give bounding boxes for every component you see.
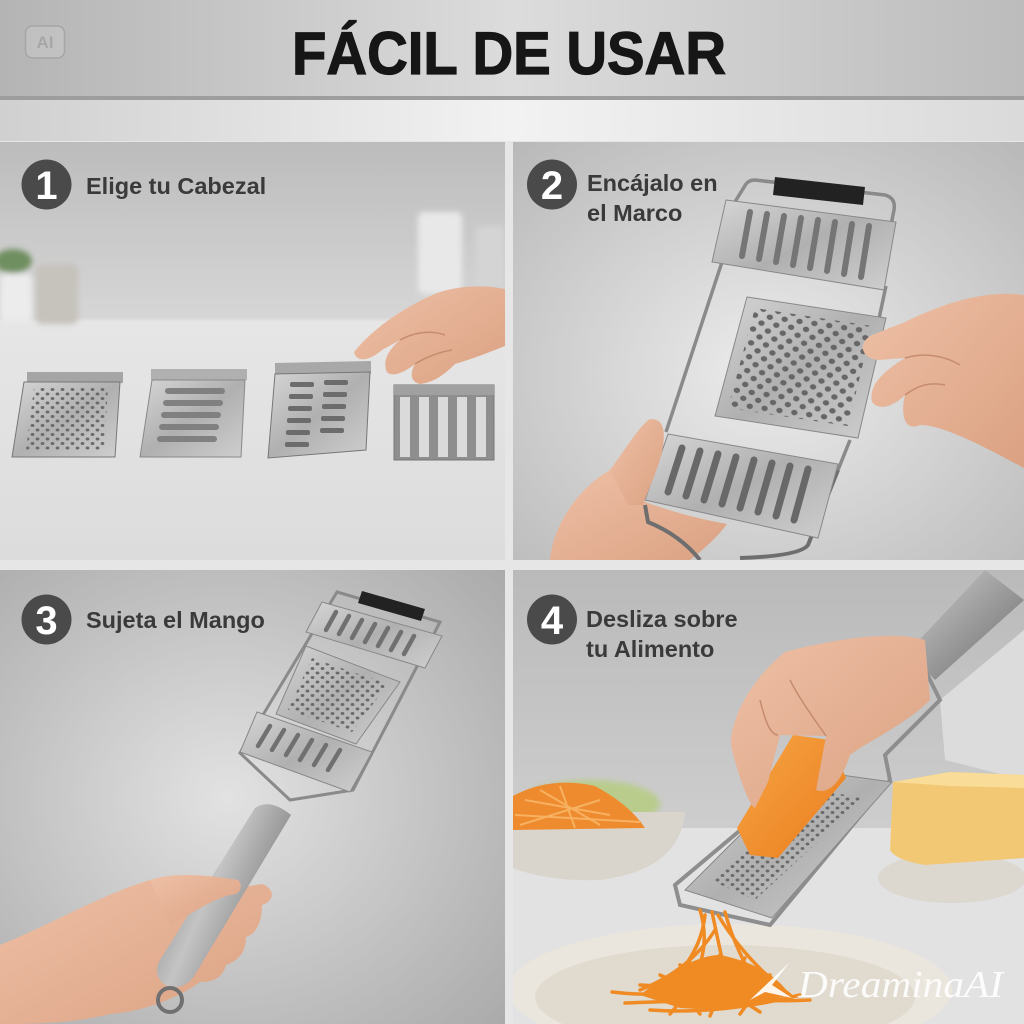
- header banner: [0, 0, 1024, 141]
- bottom slotted blade: [645, 434, 838, 538]
- step 2 badge: [527, 160, 577, 210]
- step 4 label: tu Alimento: [586, 636, 714, 662]
- step 4 label: Desliza sobre: [586, 606, 738, 632]
- countertop: [513, 828, 1024, 996]
- panel: step 4: [508, 570, 1024, 1024]
- grater head 1: [12, 372, 123, 457]
- grater head 4: [394, 385, 494, 460]
- complete grater: [157, 591, 442, 1012]
- grater in use: [675, 570, 1024, 925]
- hand on carrot: [731, 636, 930, 808]
- panel: step 1: [0, 142, 505, 560]
- step 4 badge: 4: [541, 599, 564, 643]
- step 2 badge: 2: [541, 164, 563, 208]
- salad bowl: [513, 780, 685, 880]
- center perforated plate: [715, 297, 886, 438]
- handle grip: [773, 177, 865, 205]
- title: FÁCIL DE USAR: [292, 20, 726, 87]
- step 3 label: Sujeta el Mango: [86, 607, 265, 633]
- watermark: DreaminaAI: [797, 964, 1006, 1006]
- hand palm and fingers: [0, 878, 272, 1024]
- handle: [157, 804, 291, 1012]
- hand: [354, 286, 505, 384]
- step 1 badge: 1: [35, 164, 58, 208]
- thumb of left hand: [610, 419, 664, 505]
- left hand palm and fingers: [550, 470, 727, 560]
- step 1 label: Elige tu Cabezal: [86, 173, 266, 199]
- step 4 badge: [527, 594, 577, 644]
- top slotted blade: [712, 200, 896, 290]
- carrot block: [737, 735, 846, 858]
- AI badge: [26, 26, 64, 58]
- panel: step 2: [513, 142, 1024, 560]
- frame: [645, 177, 896, 560]
- grater handle: [920, 570, 1024, 680]
- step 3 badge: [22, 594, 72, 644]
- grater head 3: [268, 361, 371, 458]
- AI badge: AI: [36, 33, 54, 52]
- grated carrot: [612, 910, 810, 1016]
- large plate: [508, 924, 952, 1024]
- background jars: [0, 212, 504, 324]
- step 2 label: el Marco: [587, 200, 682, 226]
- grated carrot fill: [640, 955, 790, 1009]
- grater head 2: [140, 369, 247, 457]
- step 2 label: Encájalo en: [587, 170, 718, 196]
- step 3 badge: 3: [35, 599, 58, 643]
- panel: step 3: [0, 570, 505, 1024]
- window light: [940, 630, 1024, 780]
- thumb: [150, 875, 241, 915]
- step 1 badge: [22, 160, 72, 210]
- cheese on plate: [878, 772, 1024, 903]
- right hand: [863, 294, 1024, 468]
